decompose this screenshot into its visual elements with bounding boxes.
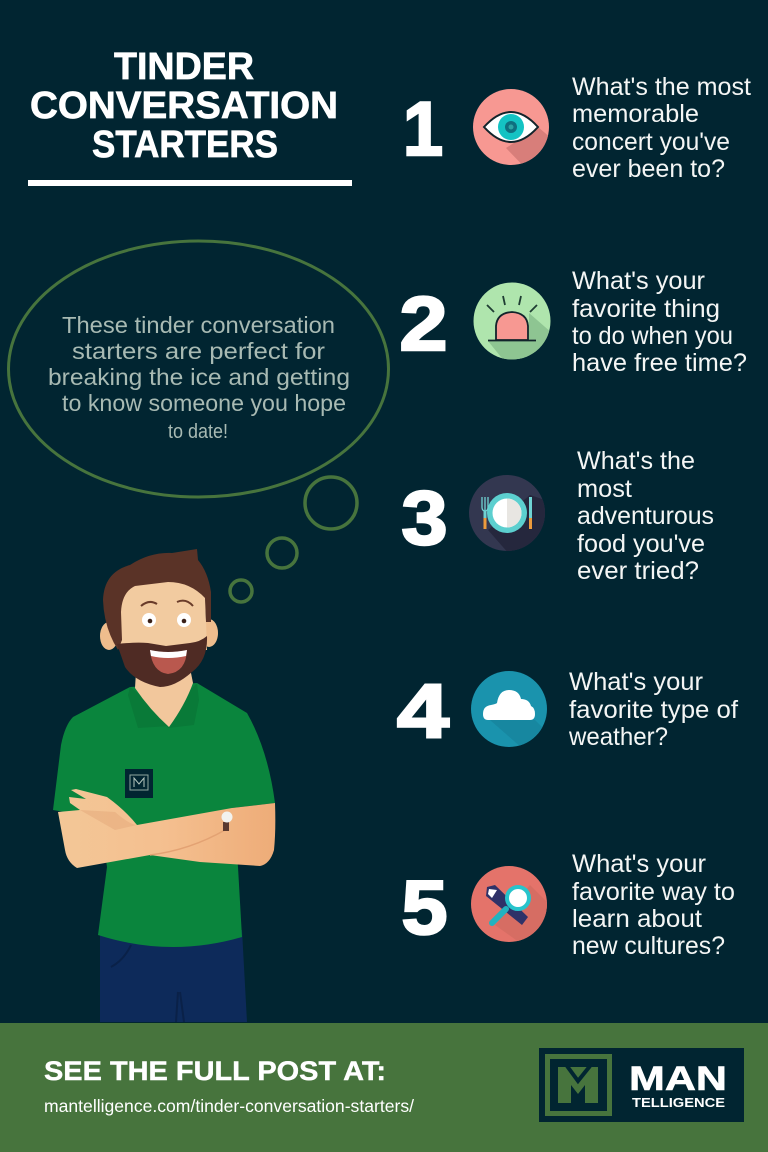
trousers: [100, 930, 247, 1022]
item 1: [403, 73, 751, 183]
question 3: food you've: [577, 530, 705, 558]
question 2: favorite thing: [572, 295, 720, 323]
thought circles: [230, 477, 357, 602]
mouth: [150, 650, 187, 674]
character: bearded man with crossed arms: [53, 549, 275, 1022]
shirt: [53, 683, 275, 947]
item 4: [396, 671, 738, 747]
neck: [135, 668, 193, 727]
item 3: [402, 447, 714, 585]
icon: eye: [473, 89, 549, 165]
bubble text: These tinder conversation: [62, 312, 335, 338]
hair: [103, 549, 211, 650]
item 2: [400, 267, 747, 377]
question 5: [572, 850, 735, 960]
question 3: What's the: [577, 447, 695, 475]
footer band: [0, 1023, 768, 1152]
question 1: memorable: [572, 100, 699, 128]
question 3: ever tried?: [577, 557, 699, 585]
logo: [539, 1048, 744, 1122]
question 4: [568, 668, 738, 751]
number 3: 3: [402, 476, 448, 561]
bubble text: [48, 312, 350, 443]
logo wordmark: MAN: [629, 1060, 727, 1098]
title underline: [28, 180, 352, 186]
eyes and brows: [141, 601, 193, 627]
question 1: concert you've: [572, 128, 730, 156]
title: TINDER: [114, 46, 254, 88]
bubble outline: [8, 241, 388, 497]
footer url: mantelligence.com/tinder-conversation-starters/: [44, 1096, 414, 1116]
question 3: most: [577, 475, 632, 503]
question 5: learn about: [572, 905, 702, 933]
question 3: [577, 447, 714, 585]
icon: plate and cutlery: [469, 475, 545, 551]
bubble text: starters are perfect for: [72, 338, 325, 364]
question 3: adventurous: [577, 502, 714, 530]
question 2: have free time?: [572, 349, 747, 377]
logo mark: [548, 1056, 610, 1114]
question 1: ever been to?: [572, 155, 725, 183]
title: STARTERS: [92, 124, 278, 166]
question 1: What's the most: [572, 73, 751, 101]
icon: pencil and magnifying glass: [471, 866, 547, 942]
question 4: favorite type of: [569, 696, 738, 724]
wristwatch: [222, 812, 232, 831]
question 2: to do when you: [572, 322, 733, 350]
item 5: [402, 850, 735, 960]
question 5: new cultures?: [572, 932, 725, 960]
face: [120, 577, 207, 650]
bubble text: to know someone you hope: [62, 390, 346, 416]
question 5: favorite way to: [572, 878, 735, 906]
number 2: 2: [400, 282, 448, 367]
question 5: What's your: [572, 850, 706, 878]
ears: [100, 619, 218, 650]
beard: [117, 636, 207, 687]
bubble text: to date!: [168, 421, 228, 443]
number 4: 4: [397, 669, 449, 754]
title: [30, 46, 338, 166]
question 1: [572, 73, 751, 183]
number 5: 5: [402, 866, 448, 951]
logo wordmark: TELLIGENCE: [632, 1095, 725, 1110]
footer heading: SEE THE FULL POST AT:: [44, 1056, 386, 1086]
question 4: weather?: [568, 723, 668, 751]
number 1: 1: [403, 87, 443, 172]
crossed arms: [58, 789, 275, 868]
title: CONVERSATION: [30, 85, 338, 127]
shirt logo badge: [125, 769, 153, 798]
question 2: [572, 267, 747, 377]
bubble text: breaking the ice and getting: [48, 364, 350, 390]
question 4: What's your: [569, 668, 703, 696]
icon: cloud: [471, 671, 547, 747]
icon: alarm light: [474, 282, 550, 360]
thought bubble: [8, 241, 388, 602]
logo wordmark: [629, 1060, 727, 1110]
question 2: What's your: [572, 267, 705, 295]
